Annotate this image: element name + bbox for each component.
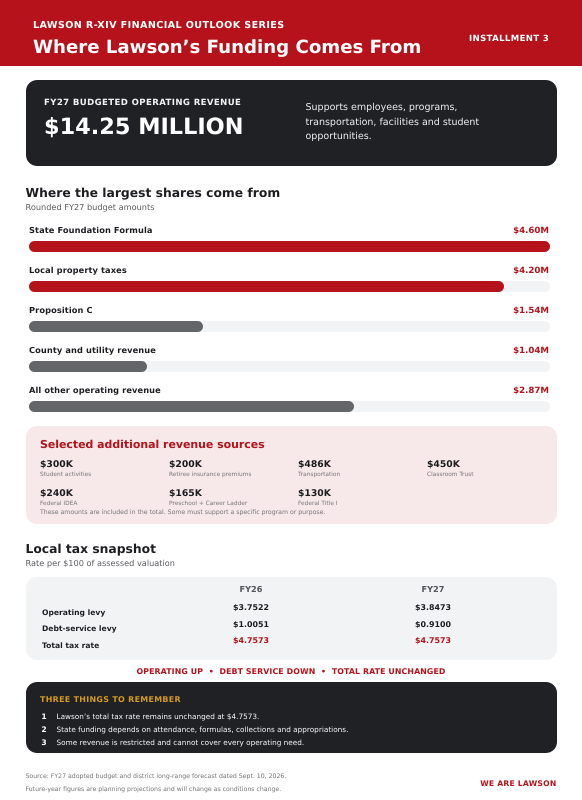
footer source note: Source: FY27 adopted budget and district long-range forecast dated Sept. 10, 2026. bbox=[26, 773, 286, 780]
panel: additional revenue sources bbox=[26, 426, 556, 524]
bar chart: $4.20M bbox=[513, 266, 549, 276]
heading: largest shares: Where the largest shares come from bbox=[26, 186, 280, 200]
panel: three things to remember: Lawson’s total tax rate remains unchanged at $4.7573. bbox=[56, 712, 259, 721]
footer brand: WE ARE LAWSON bbox=[480, 779, 556, 788]
bar chart: $4.60M bbox=[513, 226, 549, 236]
panel: three things to remember: THREE THINGS TO REMEMBER bbox=[40, 694, 181, 704]
bar chart: Proposition C bbox=[29, 305, 93, 315]
bar chart: County and utility revenue bbox=[29, 345, 156, 355]
bar chart bbox=[29, 225, 550, 412]
revenue source grid: $240K bbox=[40, 488, 73, 499]
panel: three things to remember bbox=[26, 682, 556, 753]
title: Where Lawson’s Funding Comes From bbox=[33, 37, 421, 58]
revenue source grid: $165K bbox=[169, 488, 202, 499]
panel: tax table: FY27 bbox=[422, 584, 444, 594]
bar chart: $1.54M bbox=[513, 306, 549, 316]
installment tag: INSTALLMENT 3 bbox=[469, 34, 549, 44]
panel: three things to remember: State funding depends on attendance, formulas, collections and appropriations. bbox=[56, 725, 348, 734]
panel: tax table: $4.7573 bbox=[415, 636, 451, 645]
panel: three things to remember: Some revenue is restricted and cannot cover every operating need. bbox=[56, 738, 304, 747]
panel: tax table: FY26 bbox=[240, 584, 262, 594]
revenue source grid: Classroom Trust bbox=[427, 472, 474, 478]
revenue source grid: $300K bbox=[40, 458, 73, 470]
panel: tax table: $0.9100 bbox=[415, 620, 451, 629]
revenue source grid: $450K bbox=[427, 458, 460, 470]
panel: tax table: $4.7573 bbox=[233, 636, 269, 645]
panel heading: Selected additional revenue sources bbox=[40, 438, 265, 450]
revenue source grid: $200K bbox=[169, 458, 202, 470]
revenue source grid: Transportation bbox=[298, 472, 340, 478]
panel: tax table: Total tax rate bbox=[42, 640, 99, 650]
panel: tax table: Debt-service levy bbox=[42, 624, 117, 633]
panel: tax table: Operating levy bbox=[42, 608, 105, 616]
panel: budgeted revenue hero bbox=[26, 80, 556, 166]
panel: tax table bbox=[26, 576, 556, 660]
revenue source grid: Preschool + Career Ladder bbox=[169, 501, 247, 507]
bar chart: All other operating revenue bbox=[29, 385, 161, 395]
revenue source grid: Federal IDEA bbox=[40, 501, 77, 507]
revenue source grid: $486K bbox=[298, 458, 331, 470]
panel: tax table: $1.0051 bbox=[233, 620, 269, 629]
bar chart: Local property taxes bbox=[29, 265, 127, 275]
panel: three things to remember: 1 bbox=[41, 712, 47, 721]
hero label: FY27 BUDGETED OPERATING REVENUE bbox=[44, 98, 241, 108]
bar chart: $2.87M bbox=[513, 386, 549, 396]
subheading: rounded amounts: Rounded FY27 budget amounts bbox=[26, 202, 154, 212]
revenue source grid: $130K bbox=[298, 488, 331, 499]
revenue source grid: Federal Title I bbox=[298, 501, 338, 507]
revenue source grid: Retiree insurance premiums bbox=[169, 472, 251, 478]
panel: three things to remember: 3 bbox=[41, 738, 47, 747]
header band bbox=[0, 0, 582, 66]
revenue source grid bbox=[40, 458, 474, 516]
panel: tax table: $3.7522 bbox=[233, 602, 269, 612]
bar chart: State Foundation Formula bbox=[29, 225, 153, 235]
series eyebrow: LAWSON R-XIV FINANCIAL OUTLOOK SERIES bbox=[33, 20, 285, 31]
subheading: rate note: Rate per $100 of assessed valuation bbox=[26, 558, 175, 568]
hero description: transportation, facilities and student bbox=[306, 117, 479, 128]
panel: tax table: $3.8473 bbox=[415, 602, 451, 612]
hero description: Supports employees, programs, bbox=[306, 102, 457, 113]
hero description bbox=[306, 102, 479, 142]
heading: local tax snapshot: Local tax snapshot bbox=[26, 542, 156, 556]
callout: rate summary: OPERATING UP • DEBT SERVICE DOWN • TOTAL RATE UNCHANGED bbox=[136, 667, 446, 676]
hero description: opportunities. bbox=[306, 131, 372, 142]
hero amount: $14.25 MILLION bbox=[44, 114, 243, 140]
panel: three things to remember: 2 bbox=[41, 725, 47, 734]
footer source note: Future-year figures are planning projections and will change as conditions change. bbox=[26, 786, 281, 793]
revenue source grid: Student activities bbox=[40, 472, 91, 478]
footer source note bbox=[26, 773, 286, 793]
revenue source grid: These amounts are included in the total. Some must support a specific program or purpose. bbox=[40, 508, 325, 516]
bar chart: $1.04M bbox=[513, 346, 549, 356]
